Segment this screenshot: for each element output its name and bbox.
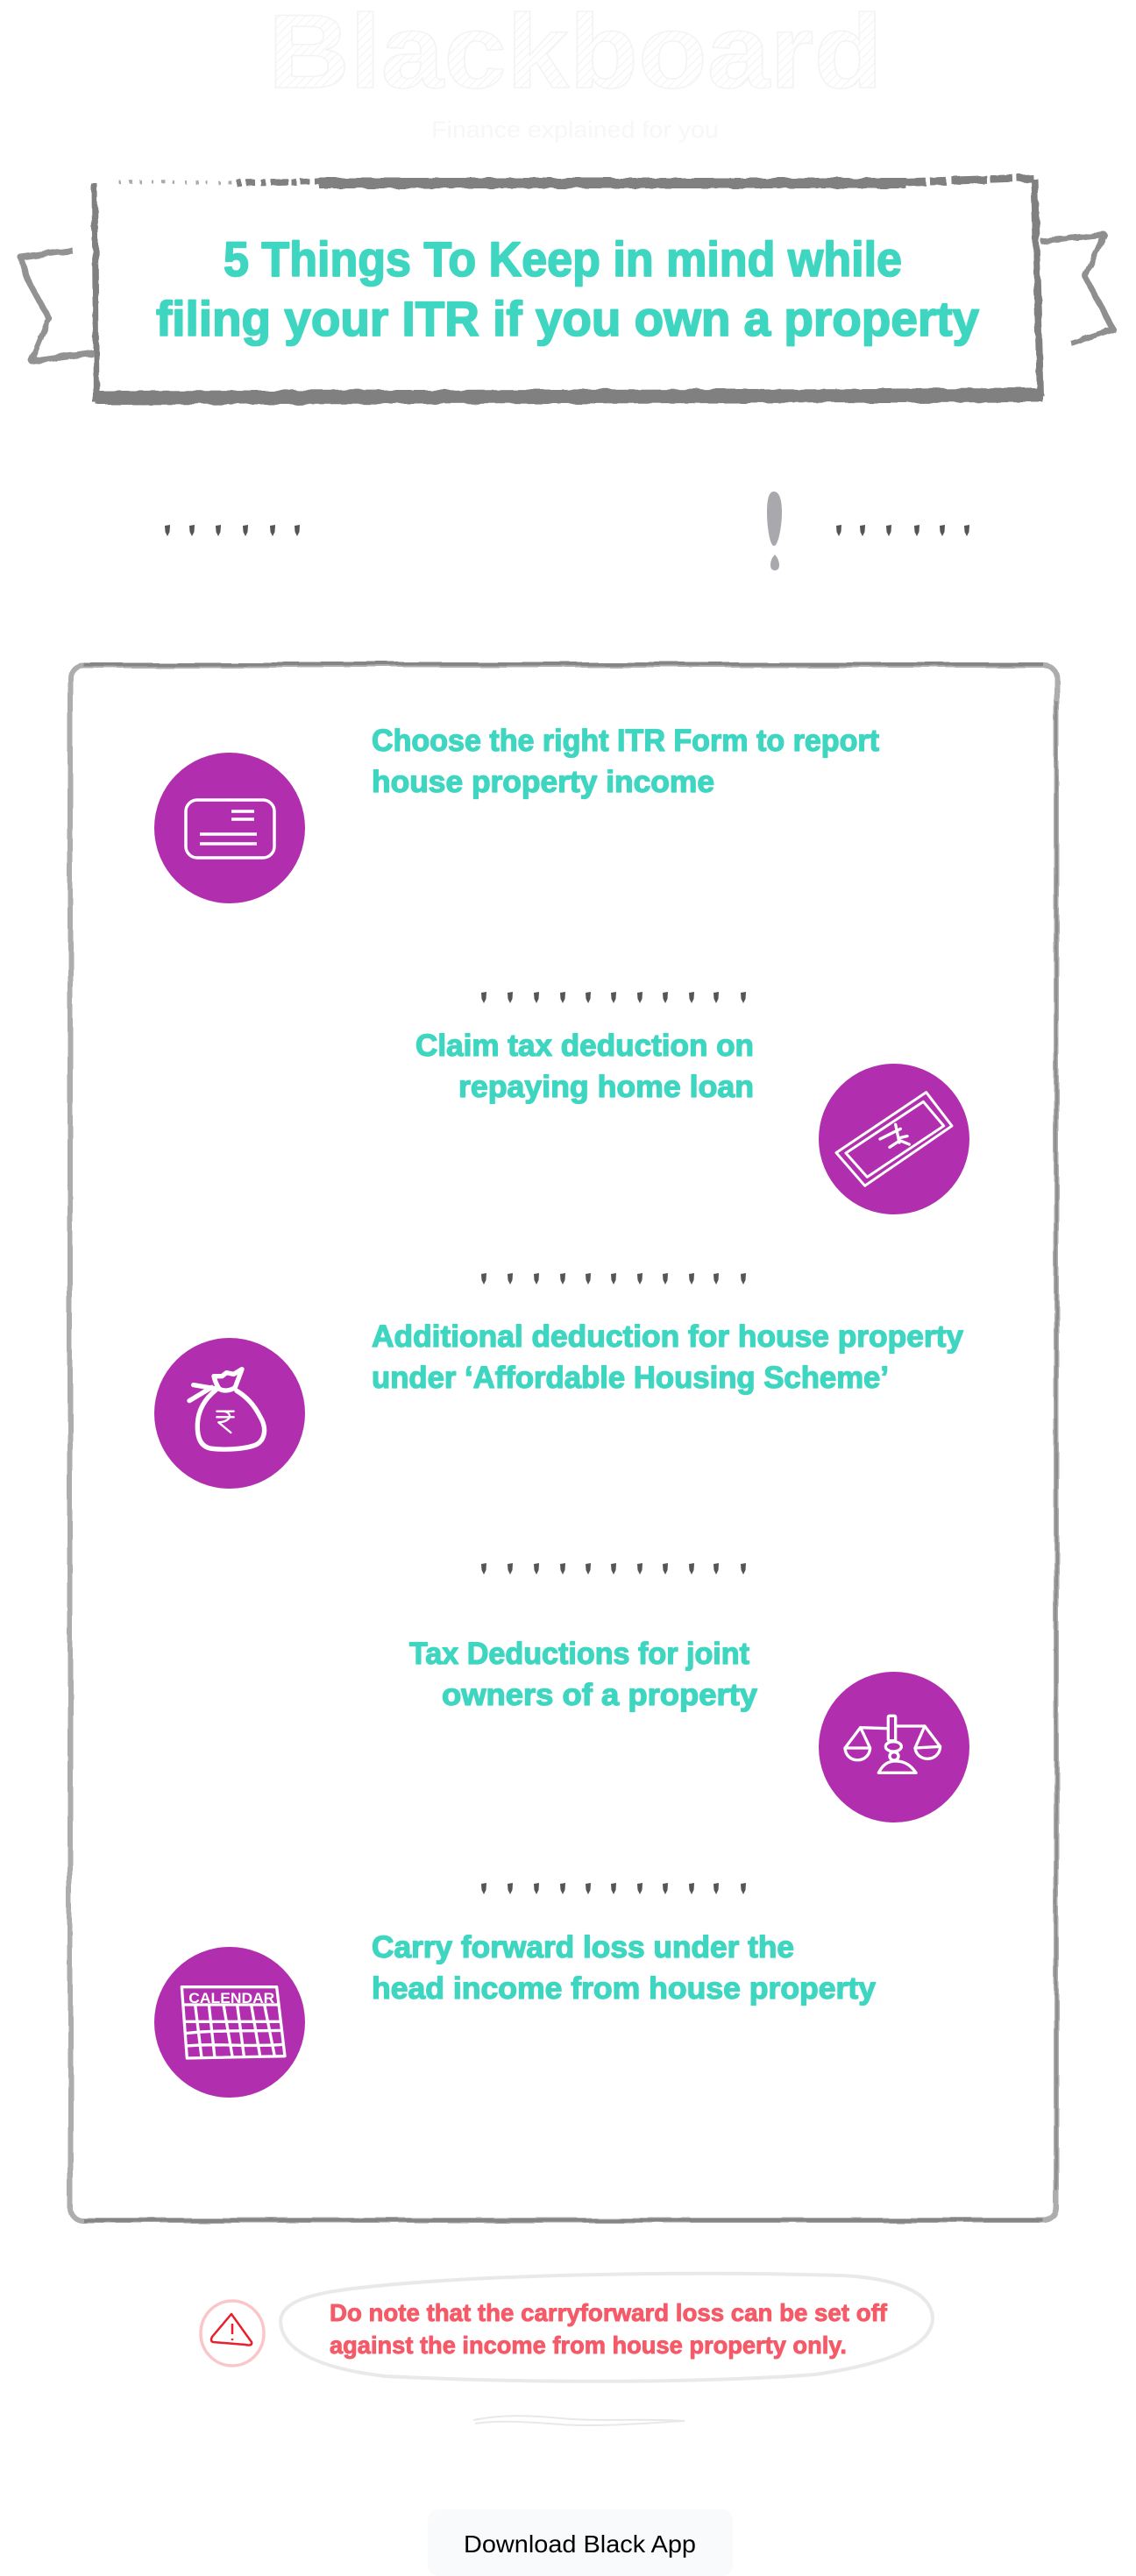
item 2 text: Claim tax deduction on [415,1029,754,1063]
download button: Download Black App [464,2530,696,2558]
item 5 [154,1930,877,2098]
panel: five things card [70,664,1056,2220]
dotted divider: right [836,525,969,536]
item 4 text: Tax Deductions for joint [409,1637,749,1671]
dotted divider: left [165,525,300,536]
icon: rupee banknote [819,1064,969,1214]
item 5 text: Carry forward loss under the [372,1930,794,1964]
icon: calendar [154,1947,305,2098]
item 1 text: house property income [372,765,714,799]
speech bubble outline [280,2274,933,2381]
item 2 [415,1029,969,1214]
dotted divider 1 [481,992,746,1003]
icon: money bag [154,1338,305,1489]
item 3 text: under ‘Affordable Housing Scheme’ [372,1361,889,1395]
note text: against the income from house property only. [330,2332,847,2359]
icon: balance scale [819,1672,969,1822]
item 2 text: repaying home loan [458,1070,754,1104]
dotted divider 4 [481,1883,746,1894]
item 1 text [372,724,879,799]
download button [428,2509,733,2576]
banner heading: filing your ITR if you own a property [156,291,979,346]
item 4 text [409,1637,758,1712]
ribbon tail: left [21,251,95,361]
item 4 text: owners of a property [442,1678,758,1712]
item 3 [154,1320,964,1489]
item 4 [409,1637,969,1822]
note text [330,2299,888,2359]
item 2 text [415,1029,754,1104]
item 5 text: head income from house property [372,1971,877,2006]
ribbon tail: right [1041,235,1113,343]
item 3 text: Additional deduction for house property [372,1320,964,1354]
title banner [21,178,1113,403]
card border [70,664,1056,2220]
note text: Do note that the carryforward loss can be set off [330,2299,888,2326]
item 3 text [372,1320,964,1395]
banner heading [156,231,979,346]
item 1 text: Choose the right ITR Form to report [372,724,879,758]
banner frame [95,178,1043,403]
icon: form document [154,753,305,903]
icon: exclamation mark [767,492,782,570]
icon: warning [201,2301,264,2366]
squiggle underline [473,2416,685,2425]
dotted divider 2 [481,1273,746,1284]
banner heading: 5 Things To Keep in mind while [224,231,902,287]
callout: carry forward note [201,2274,933,2381]
dotted divider 3 [481,1563,746,1575]
item 5 text [372,1930,877,2006]
tagline: Finance explained for you [431,117,719,143]
icon: calendar: CALENDAR [188,1990,274,2006]
item 1 [154,724,879,903]
